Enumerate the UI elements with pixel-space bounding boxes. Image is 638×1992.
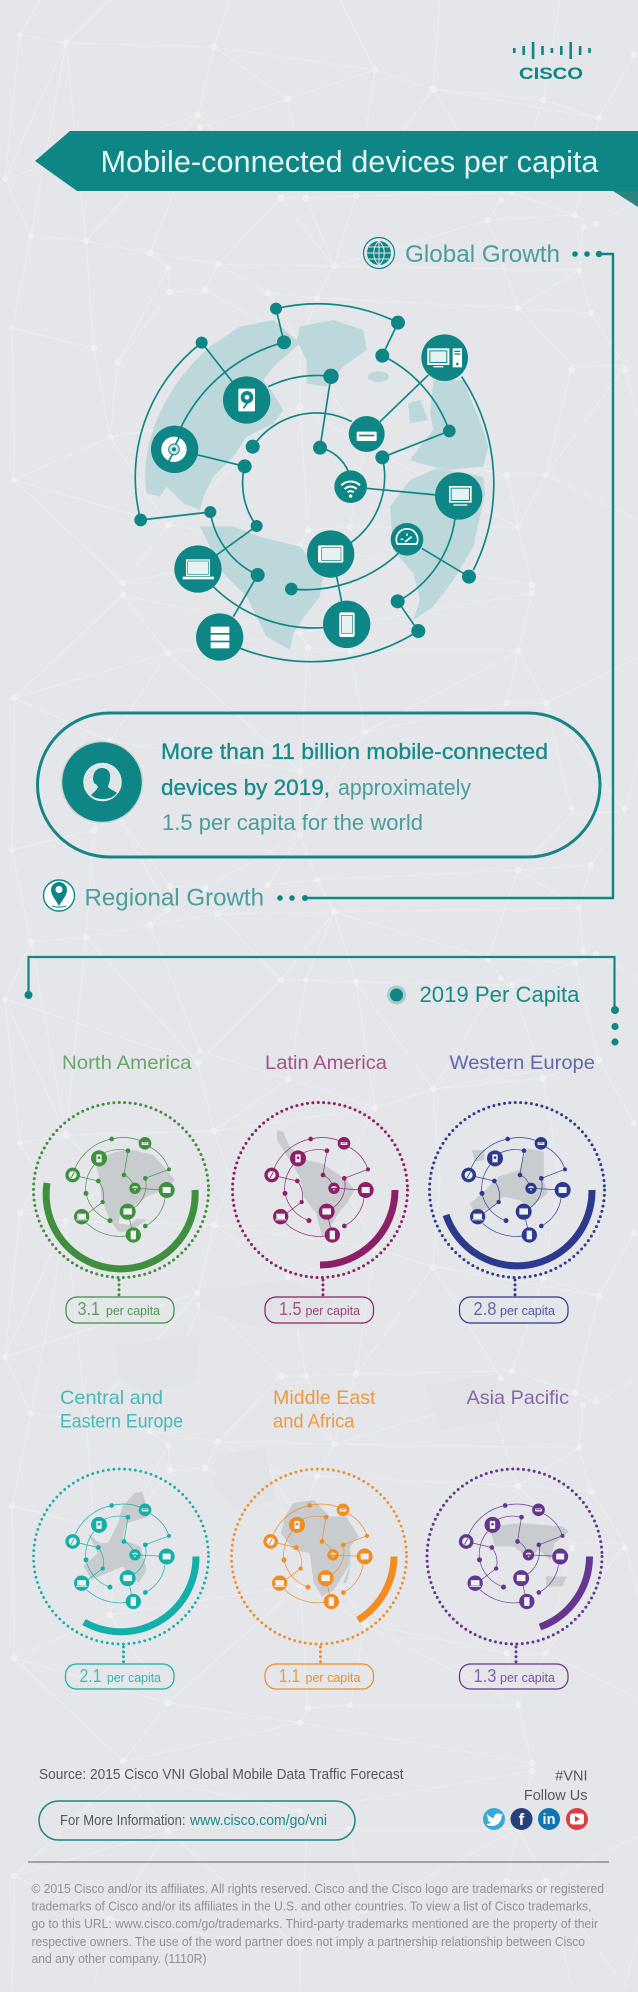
legal text: and any other company. (1110R) <box>32 1951 206 1966</box>
panel: Asia Pacific <box>427 1387 602 1689</box>
value arc <box>446 1190 592 1266</box>
value pill: 1.5 <box>279 1299 302 1319</box>
device network with map <box>263 1500 373 1609</box>
value pill: 3.1 <box>78 1299 100 1319</box>
value pill: 2.8 <box>474 1299 496 1319</box>
heading <box>273 1387 376 1432</box>
value arc <box>320 1190 395 1265</box>
device network with map <box>65 1137 175 1243</box>
value arc <box>84 1556 196 1632</box>
icon: youtube <box>566 1808 588 1830</box>
connector nodes <box>134 303 476 638</box>
heading: Middle East <box>273 1387 376 1409</box>
panel: Western Europe <box>430 1052 604 1323</box>
heading <box>60 1387 183 1432</box>
stem <box>122 1647 125 1663</box>
title banner: Mobile-connected devices per capita <box>100 145 599 179</box>
social block <box>483 1768 588 1830</box>
legal text: © 2015 Cisco and/or its affiliates. All rights reserved. Cisco and the Cisco logo are trademarks or registered <box>32 1881 604 1896</box>
legal text: respective owners. The use of the word partner does not imply a partnership relationship between Cisco <box>32 1934 585 1949</box>
logo: Cisco: CISCO <box>519 64 583 83</box>
logo: Cisco <box>513 42 591 83</box>
icon: smartphone <box>323 601 370 648</box>
dotted ring <box>232 1469 406 1644</box>
icon: facebook: f <box>519 1810 525 1829</box>
callout: 11 billion devices: devices by 2019, <box>161 775 330 800</box>
more information pill <box>39 1801 355 1840</box>
icon: card device <box>349 416 385 452</box>
value pill <box>265 1664 374 1689</box>
callout: 11 billion devices: 1.5 per capita for the world <box>162 810 423 835</box>
connector line from Global Growth to Regional Growth <box>305 254 613 898</box>
value pill: per capita <box>106 1304 160 1318</box>
title banner <box>35 131 638 207</box>
legal text: go to this URL: www.cisco.com/go/trademarks. Third-party trademarks mentioned are the property of their <box>32 1916 599 1931</box>
legal text <box>32 1881 604 1966</box>
heading: Latin America <box>265 1052 387 1074</box>
stem <box>514 1280 516 1296</box>
heading: Regional Growth <box>44 880 308 912</box>
footer divider <box>28 1862 609 1863</box>
value pill: per capita <box>306 1304 360 1318</box>
icon: map pin <box>44 880 74 911</box>
dotted ring <box>430 1102 604 1278</box>
heading: Eastern Europe <box>60 1410 183 1432</box>
heading: Central and <box>60 1387 163 1409</box>
value pill: per capita <box>500 1304 555 1318</box>
dotted ring <box>34 1102 208 1278</box>
value pill: per capita <box>306 1671 361 1685</box>
icon: hard disk <box>223 376 270 424</box>
stem <box>322 1280 324 1296</box>
callout: 11 billion devices: approximately <box>338 775 471 800</box>
icon: monitor <box>435 472 482 520</box>
icon: tablet <box>307 530 354 578</box>
connector lines <box>135 304 494 662</box>
heading: Global Growth: Global Growth <box>405 241 560 268</box>
heading: Western Europe <box>450 1052 595 1074</box>
value pill <box>66 1297 174 1323</box>
device network with map <box>264 1130 374 1243</box>
value pill: per capita <box>107 1671 161 1685</box>
value pill <box>460 1664 568 1689</box>
icon: speedometer <box>391 523 423 556</box>
stem <box>514 1647 518 1663</box>
device network with map <box>65 1492 175 1609</box>
value pill: 2.1 <box>80 1666 102 1686</box>
dotted ring <box>232 1102 408 1278</box>
social block: Follow Us <box>524 1788 588 1804</box>
more information pill: www.cisco.com/go/vni <box>189 1813 327 1829</box>
stem <box>118 1280 120 1296</box>
heading: Regional Growth: Regional Growth <box>84 884 264 912</box>
icon: desktop computer <box>421 334 468 381</box>
legal text: trademarks of Cisco and/or its affiliates in the U.S. and other countries. To view a list of Cisco trademarks, <box>32 1898 592 1914</box>
heading: and Africa <box>273 1410 355 1432</box>
device network with map <box>461 1137 571 1243</box>
panel: North America <box>34 1052 208 1323</box>
icon: linkedin: in <box>543 1812 555 1828</box>
value pill: per capita <box>500 1671 555 1685</box>
panel: Middle East and Africa <box>232 1387 406 1689</box>
value arc <box>540 1556 590 1627</box>
dotted ring <box>427 1469 602 1644</box>
icon: person <box>62 742 142 822</box>
stem <box>319 1647 322 1663</box>
panel: Latin America <box>232 1052 408 1323</box>
more information pill: For More Information: <box>60 1813 186 1829</box>
social block: #VNI <box>555 1768 588 1784</box>
value arc <box>358 1556 394 1620</box>
value pill <box>66 1664 174 1689</box>
heading: North America <box>62 1052 192 1074</box>
icon: laptop <box>174 545 222 593</box>
value pill: 1.1 <box>279 1666 300 1686</box>
icon: globe <box>364 238 394 268</box>
callout: 11 billion devices <box>38 713 600 857</box>
value pill <box>265 1297 374 1323</box>
value pill <box>460 1297 568 1323</box>
dotted ring <box>34 1469 208 1644</box>
heading: Asia Pacific <box>466 1387 569 1409</box>
regional section bracket <box>24 957 619 1046</box>
legend: 2019 Per Capita: 2019 Per Capita <box>420 982 580 1007</box>
globe device network <box>134 303 494 662</box>
source line: Source: 2015 Cisco VNI Global Mobile Data Traffic Forecast <box>39 1767 404 1783</box>
value arc <box>46 1183 195 1269</box>
icon: server stack <box>196 613 243 661</box>
icon: disc <box>151 426 198 473</box>
value pill: 1.3 <box>474 1666 496 1686</box>
icon: wifi <box>334 470 367 503</box>
globe map <box>145 320 488 650</box>
device network with map <box>459 1503 569 1609</box>
heading: Global Growth <box>364 238 602 268</box>
panel: Central and Eastern Europe <box>34 1387 208 1689</box>
icon: twitter <box>483 1808 505 1830</box>
callout: 11 billion devices: More than 11 billion mobile-connected <box>161 739 548 764</box>
